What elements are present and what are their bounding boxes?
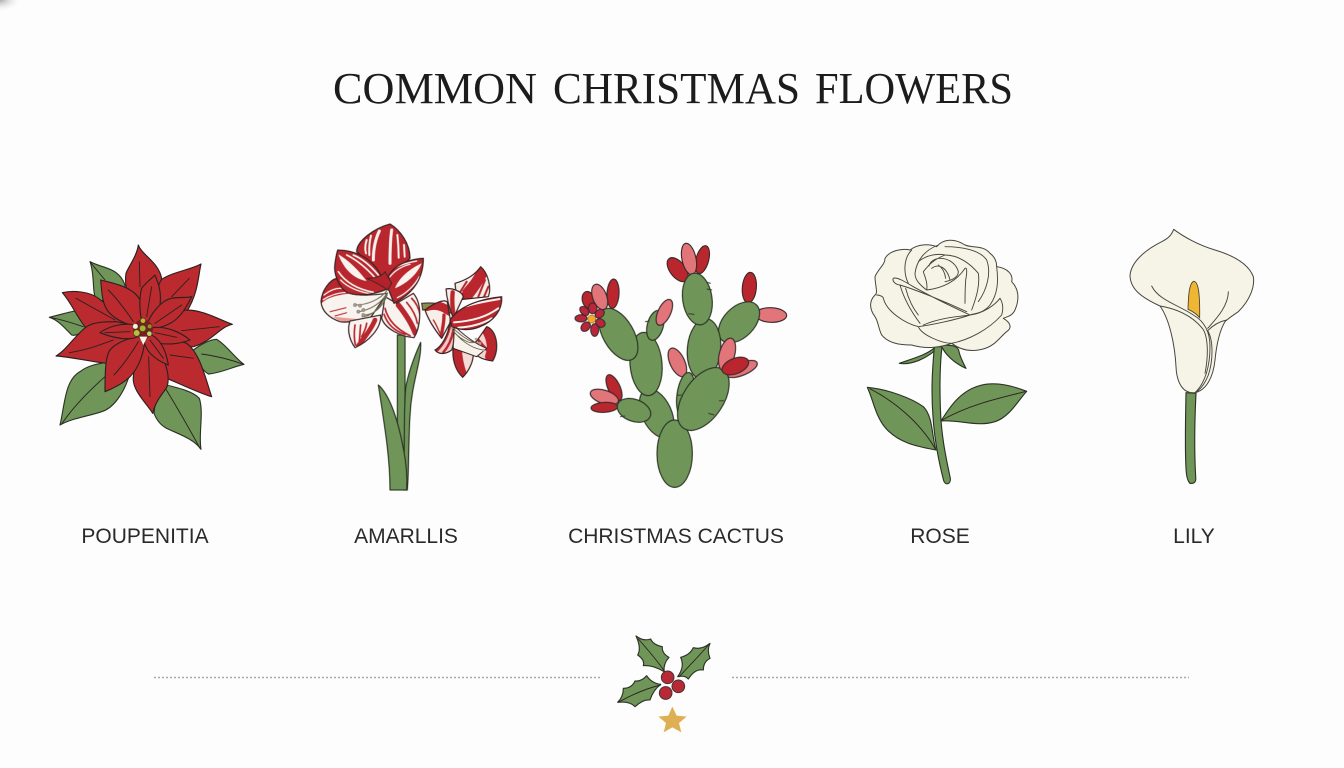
label: christmas cactus: CHRISTMAS CACTUS	[568, 525, 784, 548]
label: amaryllis: AMARLLIS	[354, 525, 458, 548]
icon: rose	[867, 240, 1027, 484]
label: poinsettia: POUPENITIA	[81, 525, 209, 548]
title: CHRISTMAS	[553, 64, 800, 113]
title: FLOWERS	[815, 64, 1013, 113]
icon: christmas cactus	[575, 242, 787, 487]
icon: poinsettia	[49, 245, 244, 449]
title: COMMON	[333, 64, 537, 113]
icon: holly sprig with star	[618, 636, 710, 732]
label: lily: LILY	[1173, 525, 1215, 548]
icon: amaryllis	[318, 222, 505, 490]
label: rose: ROSE	[910, 525, 970, 548]
icon: lily	[1130, 229, 1254, 483]
